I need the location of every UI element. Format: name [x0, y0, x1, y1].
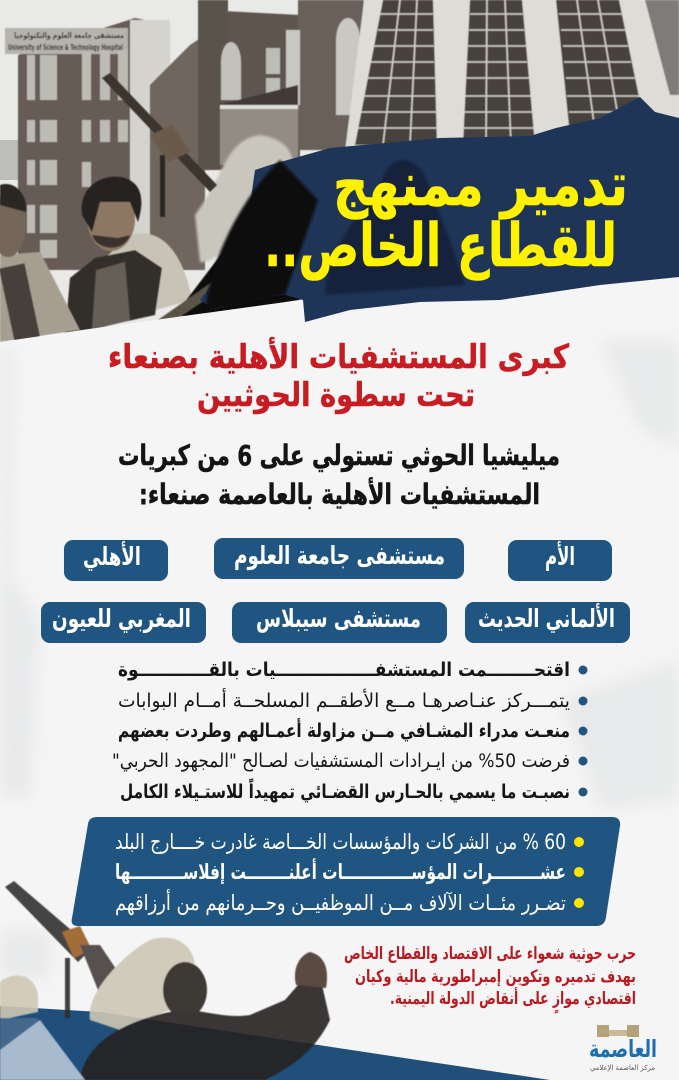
navy diagonal footer band [0, 1006, 550, 1080]
figure: dark gunman [158, 254, 302, 320]
pill: Moroccan eye hospital [41, 602, 206, 643]
black intro text: ميليشيا الحوثي تستولي على 6 من كبريات [118, 439, 560, 472]
navy brush stroke [200, 97, 679, 322]
figure: rifle held high [102, 73, 217, 217]
pill: Sabalas hospital [232, 602, 447, 643]
pill: Moroccan eye hospital: المغربي للعيون [52, 604, 191, 634]
bullet list [112, 659, 588, 803]
figure: man on left edge [0, 184, 80, 345]
pill: Sabalas hospital: مستشفى سيبلاس [256, 604, 421, 633]
red subheading: كبرى المستشفيات الأهلية بصنعاء [108, 336, 570, 377]
pill: Modern German [465, 602, 630, 643]
header photo: hospital buildings and gunmen [0, 0, 679, 345]
bottom soldiers illustration [0, 881, 330, 1080]
building: left hospital block: University of Science & Technology Hospital [8, 43, 123, 52]
figure: man at left [0, 976, 85, 1080]
bullet 5: نصبـت ما يسمي بالحـارس القضـائي تمهيداً للاستـيلاء الكامل [120, 778, 570, 803]
pill: Al-Umm: الأم [545, 541, 575, 571]
title [264, 150, 628, 281]
red closing paragraph [344, 944, 636, 1014]
pill: University of Science hospital [214, 538, 464, 579]
blue stats panel [72, 817, 620, 926]
building: left hospital block [5, 18, 170, 270]
logo: Al-Asima media centre [589, 1025, 657, 1072]
bullet 3: منعـت مدراء المشـافي مــن مزاولة أعمـالهم وطردت بعضهم [118, 718, 570, 742]
pill: Modern German: الألماني الحديث [478, 603, 615, 633]
hospital name pills [41, 538, 630, 643]
figure: bearded man [65, 177, 192, 335]
building: left hospital block: مستشفى جامعة العلوم والتكنولوجيا [14, 31, 124, 40]
figure: raised rifle [5, 881, 120, 1018]
bullet 2: يتمـــركز عنـاصرهـا مــع الأطقــم المسلحــة أمــام البوابات [118, 688, 570, 712]
pill: Al-Umm [508, 540, 612, 581]
bullet 4: فرضت 50% من ايـرادات المستشفيات لصـالح "المجهود الحربي" [112, 750, 570, 772]
pill: University of Science hospital: مستشفى جامعة العلوم [234, 541, 445, 571]
logo: Al-Asima media centre: مركز العاصمة الإعلامي [590, 1064, 655, 1072]
black intro text [118, 439, 560, 511]
red subheading: تحت سطوة الحوثيين [197, 375, 475, 415]
figure: scarf man [80, 938, 330, 1080]
stat 3: تضـرر مئــات الآلاف مــن الموظفيــن وحــرمانهم من أرزاقهم [115, 889, 566, 916]
building: glass tower [345, 0, 679, 150]
building: centre block [150, 0, 364, 270]
black intro text: المستشفيات الأهلية بالعاصمة صنعاء: [139, 477, 540, 511]
bullet 1: اقتحــــــــمت المستشفـــــــــــــــــيات بالقــــــــــــوة [118, 659, 570, 681]
pill: Al-Ahli [64, 540, 168, 581]
red subheading [108, 336, 570, 415]
figure: masked silhouette in brush [325, 160, 465, 295]
figure: headscarf and white fur [195, 135, 293, 262]
stat 1: 60 % من الشركات والمؤسسات الخـــاصة غادرت خــــارج البلد [115, 830, 566, 855]
pill: Al-Ahli: الأهلي [83, 541, 141, 571]
